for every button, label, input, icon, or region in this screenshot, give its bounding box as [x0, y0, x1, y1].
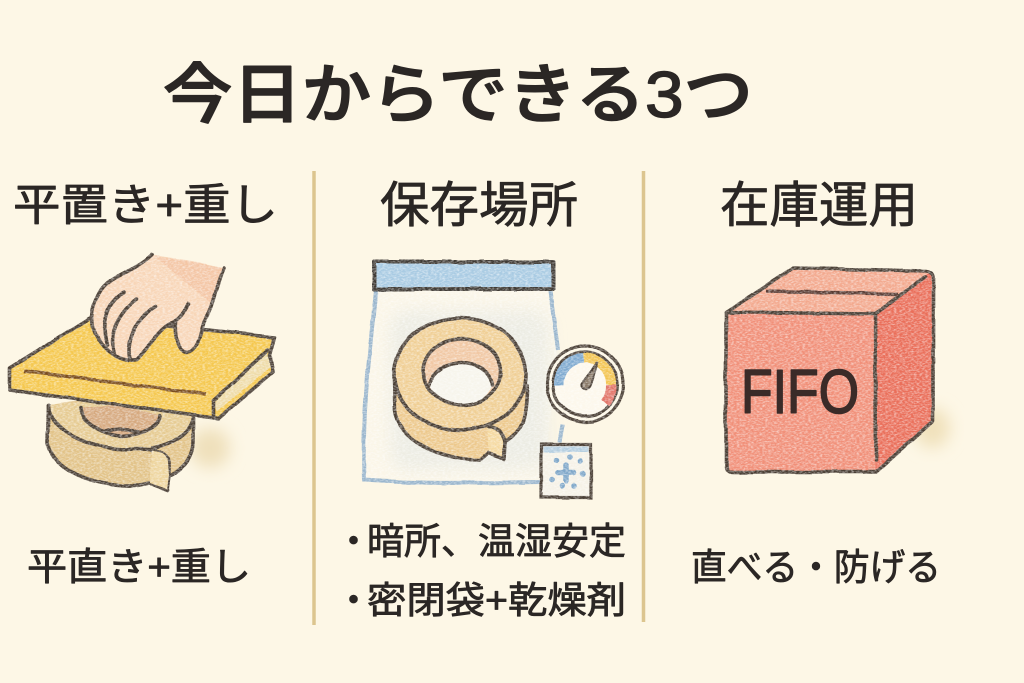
icon: hand pressing book	[92, 255, 224, 360]
icon: tape roll under book	[48, 395, 193, 490]
bag seal strip	[374, 262, 553, 289]
title: 今日からできる3つ	[163, 58, 753, 131]
heading: flat placement: 平置き+重し	[13, 181, 278, 230]
bullet line: dark place, stable temperature and humidity: 暗所、温湿安定	[367, 521, 626, 562]
panel: flat placement with weight	[10, 181, 278, 589]
icon: FIFO box	[726, 268, 933, 472]
column divider left	[312, 171, 316, 625]
caption: flat placement: 平直き+重し	[27, 547, 251, 589]
text block: storage tips	[335, 521, 626, 621]
box label: FIFO	[741, 358, 859, 427]
column divider right	[642, 171, 645, 622]
heading: inventory operation: 在庫運用	[720, 179, 918, 233]
icon: sealed bag	[363, 262, 563, 483]
icon: hygrometer gauge	[547, 346, 623, 422]
bullet line: sealed bag and desiccant: 密閉袋+乾燥剤	[367, 580, 626, 621]
panel: inventory operation	[691, 179, 950, 588]
caption: can be lined up, can be prevented: 直べる・防げる	[691, 547, 941, 588]
icon: yellow book	[10, 318, 275, 419]
icon: shadow under box	[914, 408, 950, 448]
heading: storage location: 保存場所	[380, 179, 578, 233]
icon: tape roll in bag	[394, 318, 527, 460]
bullet line: sealed bag and desiccant: ・	[335, 580, 372, 621]
icon: shadow under tape	[190, 428, 230, 468]
panel: storage location	[335, 179, 626, 621]
icon: desiccant packet	[541, 444, 591, 497]
bullet line: dark place, stable temperature and humidity: ・	[335, 521, 372, 562]
